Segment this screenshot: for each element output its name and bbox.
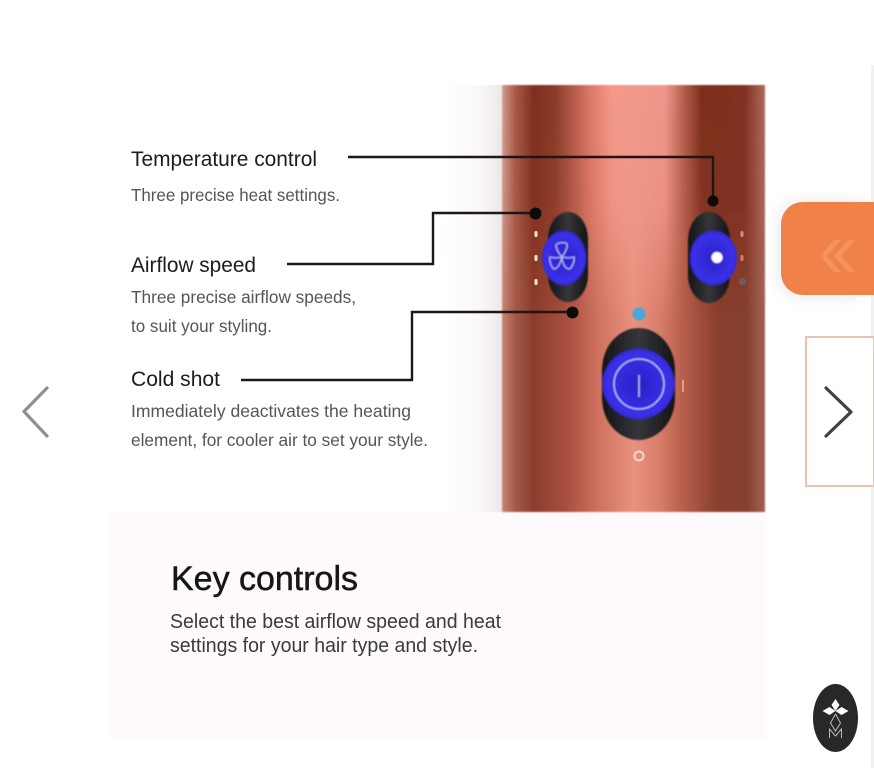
icon: double chevron [820, 240, 855, 272]
temperature level dots [739, 231, 746, 285]
text: airflow speed [131, 254, 356, 336]
bottom panel background [109, 512, 765, 738]
cold shot button [602, 328, 675, 440]
heading: key controls: Key controls [171, 560, 358, 598]
logo badge [813, 684, 858, 752]
airflow speed control [542, 212, 588, 302]
text: airflow speed: Three precise airflow speeds, [131, 287, 356, 307]
arrow: previous [24, 388, 47, 436]
hollow indicator ring [634, 452, 644, 460]
orange side tab [775, 197, 874, 301]
airflow level dots [534, 231, 538, 285]
icon: fan [550, 243, 574, 269]
product barrel [502, 85, 765, 512]
icon: emblem lower mark [830, 714, 842, 738]
blue indicator dot [632, 308, 646, 320]
cold shot tick [682, 380, 684, 392]
description: key controls [170, 611, 501, 657]
icon: power ring [614, 359, 664, 409]
leader line: airflow speed [287, 208, 542, 264]
text: temperature control [131, 148, 340, 205]
right edge strip [871, 65, 874, 768]
leader line: temperature control [348, 157, 718, 206]
text: temperature control: Three precise heat settings. [131, 185, 340, 205]
text: airflow speed: Airflow speed [131, 254, 256, 277]
text: cold shot: Cold shot [131, 368, 220, 391]
text: cold shot: Immediately deactivates the heating [131, 401, 411, 421]
icon: diamond emblem [822, 699, 848, 715]
next arrow frame [806, 337, 874, 486]
description: key controls: settings for your hair type and style. [170, 635, 478, 657]
text: cold shot: element, for cooler air to set your style. [131, 430, 428, 450]
arrow: next [826, 388, 851, 436]
leader line: cold shot [241, 306, 578, 380]
description: key controls: Select the best airflow speed and heat [170, 611, 501, 633]
barrel side fade [445, 85, 502, 512]
text: cold shot [131, 368, 428, 450]
text: airflow speed: to suit your styling. [131, 316, 272, 336]
temperature control [688, 212, 737, 303]
text: temperature control: Temperature control [131, 148, 317, 171]
